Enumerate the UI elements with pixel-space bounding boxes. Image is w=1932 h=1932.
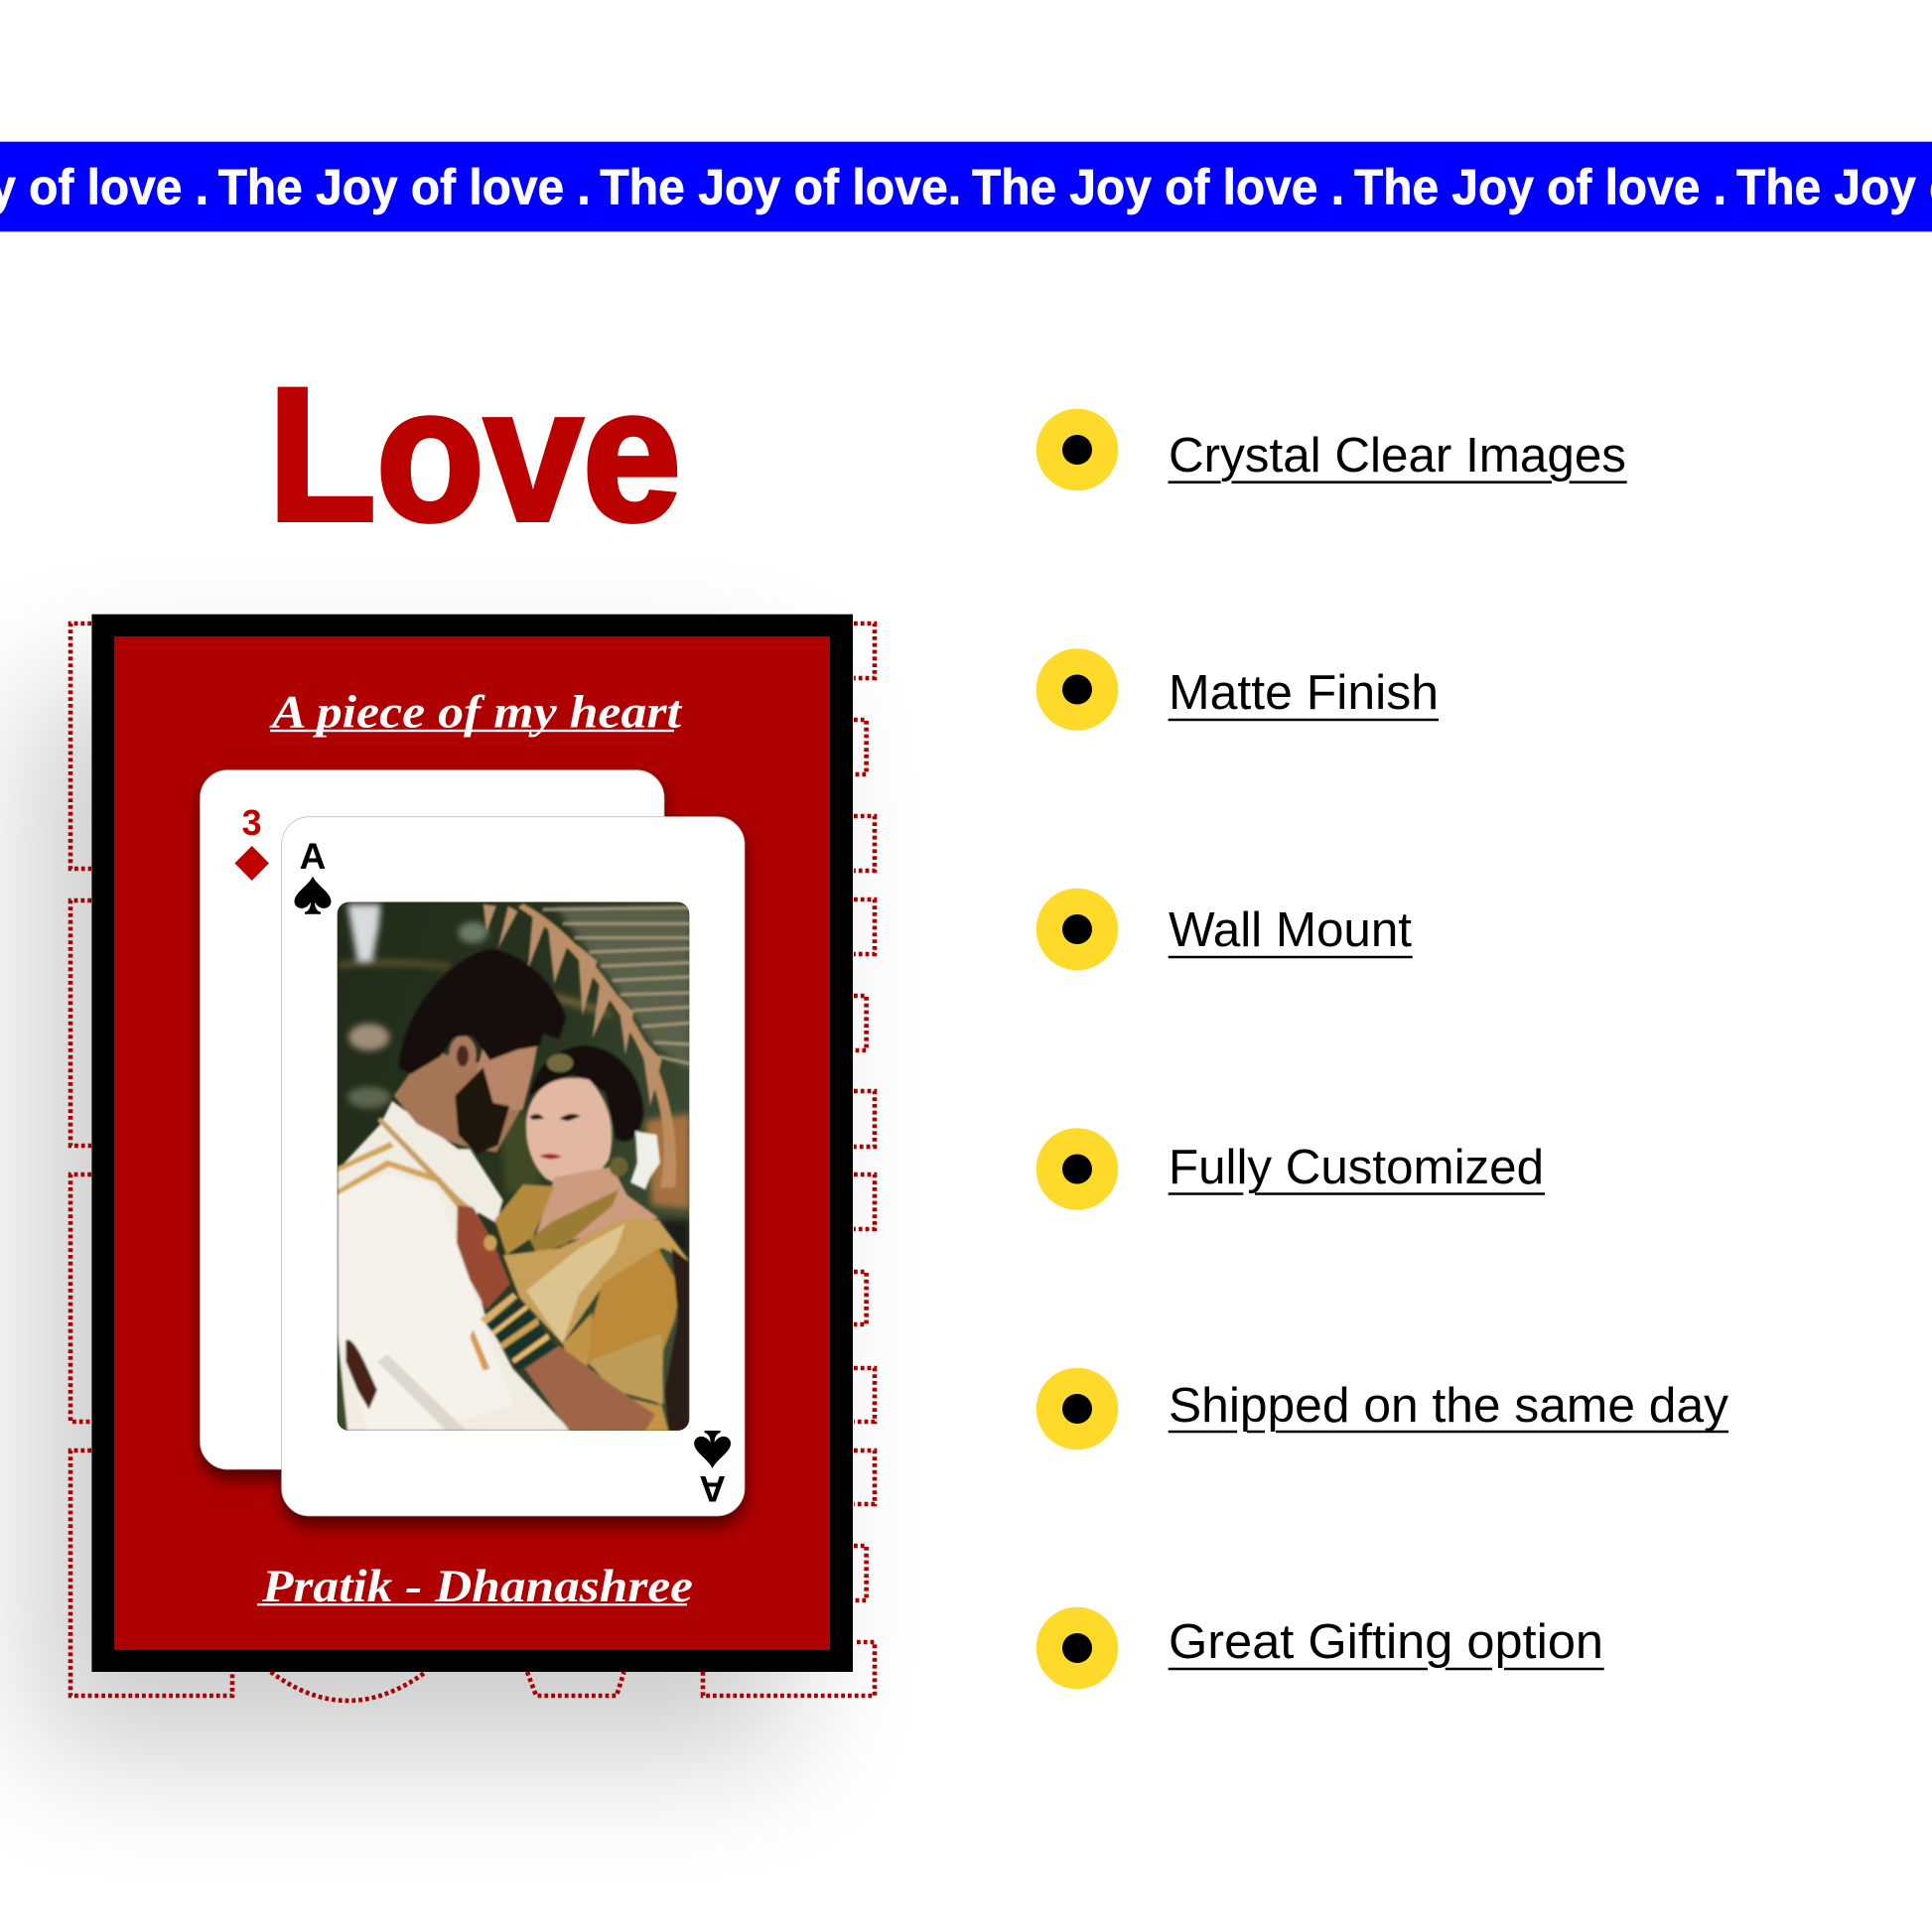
icon: yellow bullet (1036, 648, 1118, 731)
poster caption: A piece of my heart: A piece of my heart (269, 687, 683, 739)
poster drop shadow (35, 685, 789, 1752)
banner: scrolling text strip: The Joy of love . (218, 159, 591, 214)
feature: Fully Customized: Fully Customized (1169, 1140, 1544, 1194)
icon: yellow bullet (1036, 1128, 1118, 1210)
feature: Matte Finish (1036, 648, 1439, 731)
man's hair (399, 948, 566, 1074)
icon: yellow bullet (1036, 1368, 1118, 1449)
feature: Crystal Clear Images (1036, 409, 1627, 490)
couple photo illustration (338, 901, 689, 1431)
feature: Wall Mount (1036, 889, 1413, 970)
woman's hair (529, 1045, 643, 1142)
banner: scrolling text strip (0, 142, 1932, 231)
poster: black frame with red panel (91, 615, 853, 1672)
woman's face and chest (526, 1078, 612, 1183)
bangles (480, 1293, 518, 1324)
feature: Fully Customized (1036, 1128, 1545, 1210)
icon: yellow bullet (1036, 1607, 1118, 1689)
blurred foliage background (338, 904, 690, 1262)
feature: Crystal Clear Images: Crystal Clear Images (1169, 428, 1626, 483)
feature: Wall Mount: Wall Mount (1169, 902, 1412, 957)
front playing card: ace of spades: A (699, 1468, 726, 1509)
back playing card: 3 of diamonds: 3 (242, 802, 262, 843)
poster caption: Pratik - Dhanashree: Pratik - Dhanashree (261, 1561, 693, 1612)
feature: Great Gifting option (1036, 1607, 1604, 1689)
flowers and earring (630, 1131, 660, 1189)
feature: Shipped on the same day: Shipped on the same day (1169, 1378, 1728, 1433)
icon: yellow bullet (1036, 409, 1118, 490)
banner: scrolling text strip: The Joy of love . (1354, 159, 1726, 214)
card shadows (201, 776, 745, 1526)
banner: scrolling text strip: The Joy of love . (972, 159, 1344, 214)
title: Love: Love (268, 349, 681, 560)
feature: Great Gifting option: Great Gifting option (1169, 1614, 1603, 1669)
back playing card: 3 of diamonds (201, 770, 664, 1469)
front playing card: ace of spades (282, 817, 745, 1516)
man's neck and face (394, 1049, 523, 1153)
saree blouse and border (494, 1184, 554, 1255)
palm fronds (338, 903, 690, 1431)
icon: yellow bullet (1036, 889, 1118, 970)
man's kurta (338, 1101, 571, 1431)
hand and arm with mehndi (457, 1205, 510, 1311)
feature: Shipped on the same day (1036, 1368, 1728, 1449)
front playing card: ace of spades: A (300, 836, 326, 877)
banner: scrolling text strip: The Joy of love. (600, 159, 961, 214)
dotted cut-out frame (70, 623, 875, 1701)
feature: Matte Finish: Matte Finish (1169, 665, 1439, 720)
